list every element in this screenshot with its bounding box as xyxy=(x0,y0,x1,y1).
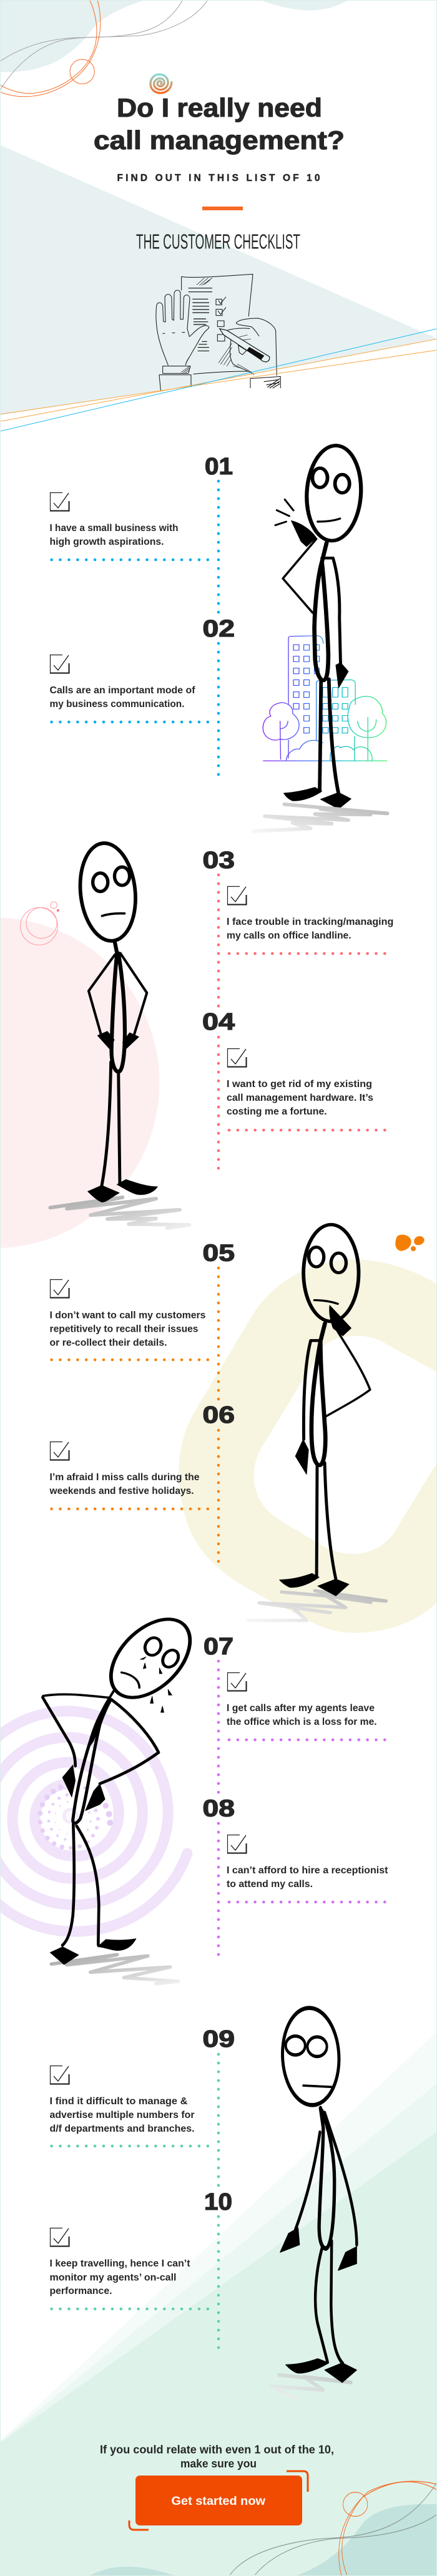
divider dots 01 xyxy=(52,559,208,561)
title xyxy=(94,93,345,155)
text 05 xyxy=(50,1310,206,1348)
text 04: costing me a fortune. xyxy=(227,1106,327,1117)
connector dots 02 xyxy=(217,643,220,774)
divider dots 04 xyxy=(229,1129,385,1131)
text 01 xyxy=(50,523,179,547)
text 07: I get calls after my agents leave xyxy=(227,1703,375,1714)
call to action text xyxy=(100,2444,334,2470)
header decoration xyxy=(0,0,437,415)
number 05: 05 xyxy=(202,1241,235,1267)
divider dots 08 xyxy=(229,1901,385,1903)
connector dots 08 xyxy=(217,1823,220,1954)
text 02: Calls are an important mode of xyxy=(50,685,195,696)
icon: checkbox 01 xyxy=(50,493,69,511)
icon: spiral logo xyxy=(150,74,172,93)
text 01: I have a small business with xyxy=(50,523,179,534)
mint background xyxy=(0,2032,437,2576)
divider dots 02 xyxy=(52,721,208,723)
text 01: high growth aspirations. xyxy=(50,537,164,547)
divider dots 03 xyxy=(229,952,385,955)
number 06: 06 xyxy=(202,1402,235,1428)
text 02: my business communication. xyxy=(50,699,185,710)
connector dots 01 xyxy=(217,481,220,612)
panel: items 07 and 08 xyxy=(0,1606,388,1984)
button: get started now: Get started now xyxy=(171,2495,265,2508)
text 06: weekends and festive holidays. xyxy=(49,1486,194,1496)
number 01: 01 xyxy=(205,454,233,480)
text 03: my calls on office landline. xyxy=(227,930,351,941)
text 10: performance. xyxy=(50,2286,112,2296)
text 09 xyxy=(50,2096,195,2134)
text 03 xyxy=(227,917,393,941)
figure shadow and head xyxy=(43,1606,206,1984)
number 04: 04 xyxy=(202,1009,235,1035)
panel: items 01 and 02 xyxy=(50,444,387,831)
icon: checkbox 10 xyxy=(50,2228,69,2247)
connector dots 05 xyxy=(217,1268,220,1399)
connector dots 07 xyxy=(217,1661,220,1792)
title: call management? xyxy=(94,125,345,155)
purple spiral background xyxy=(0,1711,187,1931)
orange divider xyxy=(202,207,243,210)
panel: items 03 and 04 xyxy=(0,841,393,1248)
connector dots 10 xyxy=(217,2217,220,2348)
icon: checkbox 03 xyxy=(227,886,247,905)
icon: checkbox 04 xyxy=(227,1048,247,1067)
text 04: call management hardware. It’s xyxy=(227,1093,373,1103)
text 05: or re-collect their details. xyxy=(50,1338,167,1348)
text 09: I find it difficult to manage & xyxy=(50,2096,188,2107)
text 04 xyxy=(227,1079,373,1117)
number 08: 08 xyxy=(202,1796,235,1822)
divider dots 10 xyxy=(52,2308,208,2310)
connector dots 03 xyxy=(217,875,220,1006)
title: Do I really need xyxy=(117,93,322,122)
coloured header lines xyxy=(0,329,437,431)
checklist heading: THE CUSTOMER CHECKLIST xyxy=(136,230,300,253)
figure: crying man xyxy=(42,1606,206,1984)
icon: checkbox 06 xyxy=(50,1442,69,1460)
number 03: 03 xyxy=(202,847,235,874)
text 06 xyxy=(49,1472,200,1496)
text 05: I don’t want to call my customers xyxy=(50,1310,206,1320)
text 07: the office which is a loss for me. xyxy=(227,1717,377,1727)
button: get started now xyxy=(129,2471,308,2530)
text 07 xyxy=(227,1703,377,1727)
pink background circle xyxy=(0,917,160,1248)
call to action text: make sure you xyxy=(180,2457,257,2470)
divider dots 09 xyxy=(52,2145,208,2147)
text 10: I keep travelling, hence I can’t xyxy=(50,2258,190,2269)
figure: man hands on hips xyxy=(50,841,190,1228)
text 04: I want to get rid of my existing xyxy=(227,1079,372,1090)
connector dots 09 xyxy=(217,2054,220,2185)
text 03: I face trouble in tracking/managing xyxy=(227,917,393,927)
connector dots 06 xyxy=(217,1430,220,1561)
decorative pink rings xyxy=(21,902,59,945)
icon: checkbox 09 xyxy=(50,2066,69,2084)
icon: hands filling a checklist xyxy=(156,274,280,390)
icon: checkbox 07 xyxy=(227,1672,247,1691)
number 09: 09 xyxy=(202,2026,235,2052)
subtitle: FIND OUT IN THIS LIST OF 10 xyxy=(117,173,320,183)
text 06: I’m afraid I miss calls during the xyxy=(50,1472,200,1483)
panel: items 05 and 06 xyxy=(49,1224,437,1633)
text 05: repetitively to recall their issues xyxy=(50,1324,199,1334)
figure: man thinking xyxy=(248,1224,386,1621)
icon: checkbox 08 xyxy=(227,1835,247,1853)
shadow of figure xyxy=(253,804,387,831)
figure body xyxy=(42,1697,159,1945)
text 08 xyxy=(227,1865,388,1890)
call to action text: If you could relate with even 1 out of the 10, xyxy=(100,2444,334,2456)
icon: checkbox 02 xyxy=(50,655,69,673)
text 09: d/f departments and branches. xyxy=(50,2124,195,2134)
beige rounded triangle background xyxy=(179,1259,437,1633)
number 07: 07 xyxy=(204,1634,233,1660)
purple dotted spiral xyxy=(37,1785,113,1850)
text 10 xyxy=(50,2258,190,2296)
divider dots 07 xyxy=(229,1739,385,1741)
text 09: advertise multiple numbers for xyxy=(50,2110,195,2120)
number 10: 10 xyxy=(204,2189,232,2215)
panel: items 09 and 10 with call to action xyxy=(0,2004,437,2576)
panel: header xyxy=(0,0,437,431)
text 08: to attend my calls. xyxy=(227,1879,313,1890)
divider dots 06 xyxy=(52,1508,208,1510)
icon: checkbox 05 xyxy=(50,1279,69,1298)
connector dots 04 xyxy=(217,1037,220,1168)
number 02: 02 xyxy=(202,616,235,642)
divider dots 05 xyxy=(52,1359,208,1361)
figure: man with glasses xyxy=(270,2004,356,2399)
text 10: monitor my agents’ on-call xyxy=(50,2273,176,2283)
figure: man on phone xyxy=(275,444,363,809)
text 02 xyxy=(50,685,195,710)
illustration: city xyxy=(263,636,387,761)
orange blobs xyxy=(395,1234,425,1251)
text 08: I can’t afford to hire a receptionist xyxy=(227,1865,388,1876)
